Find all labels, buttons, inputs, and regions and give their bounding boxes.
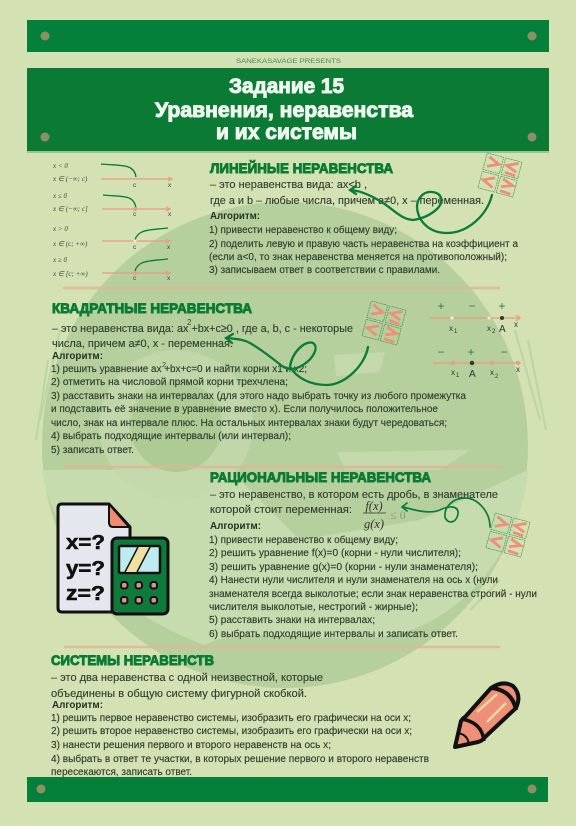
arrow: curl to formula bbox=[226, 334, 368, 385]
chart: x less or equal 0: x bbox=[168, 211, 172, 218]
bar rivet right bbox=[528, 32, 536, 40]
algorithm: (если a<0, то знак неравенства меняется на противоположный); bbox=[209, 252, 507, 263]
chart: x less than 0: x ∈ (−∞; c) bbox=[52, 175, 88, 183]
equations: x=? bbox=[66, 532, 105, 554]
equations: y=? bbox=[66, 558, 105, 580]
algorithm: Алгоритм: bbox=[52, 351, 103, 362]
bottom bar bbox=[27, 777, 548, 802]
algorithm: 3) решить уравнение g(x)=0 (корни - нули знаменателя); bbox=[209, 562, 478, 573]
algorithm: 5) записать ответ. bbox=[51, 445, 134, 456]
algorithm: числителя выколотые, нестрогий - жирные); bbox=[209, 602, 418, 613]
arrow: curl to formula bbox=[402, 498, 490, 527]
title line 2: Уравнения, неравенства bbox=[155, 99, 413, 122]
number line: roots with A right: − bbox=[468, 299, 476, 313]
definition: которой стоит переменная: bbox=[210, 504, 352, 516]
definition: – это неравенство, в котором есть дробь, в знаменателе bbox=[210, 489, 498, 501]
panel: linear inequalities bbox=[209, 153, 522, 276]
algorithm: 2) решить второе неравенство системы, изобразить его графически на оси x; bbox=[51, 725, 412, 737]
definition: 2 bbox=[187, 318, 192, 327]
chart: x greater or equal 0 bbox=[52, 256, 171, 282]
number line: roots with A right: A bbox=[499, 324, 506, 335]
algorithm: 4) выбрать подходящие интервалы (или интервал); bbox=[51, 430, 291, 442]
formula fraction: f(x) bbox=[365, 499, 383, 513]
top header bar bbox=[27, 20, 549, 52]
document fold bbox=[109, 504, 129, 527]
chart: x greater than 0: x ∈ (c; +∞) bbox=[52, 240, 88, 248]
chart: x greater than 0 bbox=[52, 225, 171, 251]
definition bbox=[52, 318, 353, 350]
number line: roots with A right: x bbox=[487, 324, 491, 333]
algorithm bbox=[51, 700, 429, 778]
panel: linear inequality charts bbox=[52, 162, 172, 282]
heading: КВАДРАТНЫЕ НЕРАВЕНСТВА bbox=[52, 300, 252, 316]
icon: pencil bbox=[455, 683, 518, 747]
definition bbox=[210, 489, 498, 516]
equations bbox=[66, 532, 105, 605]
definition bbox=[51, 672, 323, 700]
chart: x less than 0 bbox=[52, 162, 172, 189]
title panel bbox=[27, 68, 549, 151]
number line: roots with A right bbox=[430, 299, 520, 335]
number line: A between roots: A bbox=[469, 369, 476, 380]
algorithm bbox=[51, 351, 466, 456]
algorithm: 4) Нанести нули числителя и нули знаменателя на ось x (нули bbox=[209, 575, 498, 586]
heading: РАЦИОНАЛЬНЫЕ НЕРАВЕНСТВА bbox=[210, 469, 431, 485]
icon: comparison tiles bbox=[362, 301, 406, 345]
algorithm: 2 bbox=[162, 360, 166, 369]
bar rivet left bbox=[36, 784, 46, 794]
chart: x greater or equal 0: c bbox=[133, 275, 137, 282]
definition: – это два неравенства с одной неизвестной, которые bbox=[51, 672, 323, 684]
panel: quadratic inequalities bbox=[51, 299, 521, 456]
definition: где a и b – любые числа, причем a≠0, x – переменная. bbox=[210, 195, 484, 207]
number line: A between roots: 2 bbox=[495, 374, 499, 380]
number line: roots with A right: x bbox=[449, 324, 453, 333]
number line: A between roots bbox=[433, 345, 521, 380]
chart: x less or equal 0: x ≤ 0 bbox=[52, 192, 67, 200]
divider 3 bbox=[64, 646, 500, 648]
chart: x greater than 0: x bbox=[167, 244, 171, 251]
divider top bbox=[27, 151, 549, 153]
bar rivet right bbox=[528, 784, 536, 794]
arrow: curl to formula bbox=[350, 186, 492, 233]
number line: roots with A right: + bbox=[498, 299, 506, 313]
equations: z=? bbox=[66, 583, 105, 605]
chart: x less or equal 0: x ∈ (−∞; c] bbox=[52, 205, 88, 213]
chart: x greater or equal 0: x ≥ 0 bbox=[52, 256, 67, 264]
algorithm: 1) привести неравенство к общему виду; bbox=[209, 534, 398, 546]
icon: comparison tiles bbox=[478, 153, 522, 197]
title rivet right bbox=[528, 132, 536, 142]
algorithm: 4) выбрать в ответ те участки, в которых решение первого и второго неравенств bbox=[51, 753, 429, 765]
title rivet left bbox=[40, 132, 50, 142]
algorithm: 1) привести неравенство к общему виду; bbox=[209, 224, 397, 236]
heading: ЛИНЕЙНЫЕ НЕРАВЕНСТВА bbox=[210, 159, 393, 176]
chart: x less than 0: c bbox=[133, 182, 137, 189]
algorithm: и подставить её значение в уравнение вместо x). Если получилось положительное bbox=[51, 404, 438, 415]
algorithm: 5) расставить знаки на интервалах; bbox=[209, 615, 375, 626]
number line: A between roots: x bbox=[516, 365, 520, 374]
number line: A between roots: + bbox=[467, 345, 475, 359]
document bbox=[58, 504, 130, 612]
chart: x greater or equal 0: x ∈ [c; +∞) bbox=[52, 270, 88, 278]
definition: объединены в общую систему фигурной скобкой. bbox=[51, 688, 307, 700]
algorithm: 6) выбрать подходящие интервалы и записать ответ. bbox=[209, 628, 458, 640]
number line: A between roots: − bbox=[500, 345, 508, 359]
panel: systems of inequalities bbox=[51, 652, 429, 778]
formula fraction bbox=[363, 499, 406, 531]
algorithm: 2) отметить на числовой прямой корни трехчлена; bbox=[51, 377, 288, 388]
definition bbox=[210, 179, 484, 207]
calculator buttons bbox=[121, 582, 157, 604]
icon: equations and calculator bbox=[58, 504, 168, 614]
divider 2 bbox=[64, 466, 500, 468]
algorithm: знаменателя всегда выколотые; если знак неравенства строгий - нули bbox=[209, 589, 537, 600]
heading: СИСТЕМЫ НЕРАВЕНСТВ bbox=[51, 652, 214, 668]
title line 1: Задание 15 bbox=[229, 75, 344, 98]
algorithm: Алгоритм: bbox=[210, 521, 261, 532]
algorithm: 3) нанести решения первого и второго неравенств на ось x; bbox=[51, 740, 331, 751]
algorithm bbox=[209, 211, 518, 276]
algorithm: 3) расставить знаки на интервалах (для этого надо выбрать точку из любого промежутка bbox=[51, 390, 466, 402]
algorithm: 3) записываем ответ в соответствии с правилами. bbox=[209, 265, 440, 276]
algorithm: Алгоритм: bbox=[210, 211, 260, 222]
number line: A between roots: x bbox=[451, 368, 455, 377]
chart: x less than 0: x bbox=[168, 182, 172, 189]
chart: x less or equal 0 bbox=[52, 192, 172, 218]
chart: x greater than 0: x > 0 bbox=[52, 225, 68, 233]
formula fraction: g(x) bbox=[364, 517, 384, 531]
number line: A between roots: 1 bbox=[456, 373, 460, 379]
title line 3: и их системы bbox=[216, 121, 357, 144]
divider 1 bbox=[63, 287, 500, 289]
definition: – это неравенства вида: ax +bx+c≥0 , где a, b, c - некоторые bbox=[52, 323, 353, 335]
icon: comparison tiles bbox=[486, 513, 530, 557]
calculator screen bbox=[119, 546, 160, 573]
number line: roots with A right: 2 bbox=[492, 329, 496, 335]
algorithm: число, знак на интервале плюс. На остальных интервалах знаки будут чередоваться; bbox=[51, 417, 447, 429]
chart: x greater than 0: c bbox=[133, 244, 137, 251]
number line: A between roots: x bbox=[490, 368, 494, 377]
formula fraction: ≤ 0 bbox=[390, 508, 406, 522]
chart: x less or equal 0: c bbox=[133, 211, 137, 218]
algorithm: 1) решить уравнение ax +bx+c=0 и найти корни x1 и x2; bbox=[51, 364, 307, 375]
bar rivet left bbox=[40, 32, 50, 40]
number line: roots with A right: + bbox=[437, 299, 445, 313]
definition: числа, причем a≠0, x - переменная. bbox=[52, 338, 233, 350]
number line: roots with A right: 1 bbox=[454, 329, 458, 335]
algorithm: Алгоритм: bbox=[52, 700, 103, 711]
presenter caption: SANEKASAVAGE PRESENTS bbox=[236, 58, 342, 65]
algorithm: 2) решить уравнение f(x)=0 (корни - нули числителя); bbox=[209, 548, 461, 559]
background brush circle bbox=[36, 202, 546, 688]
algorithm: 1) решить первое неравенство системы, изобразить его графически на оси x; bbox=[51, 712, 411, 724]
number line: roots with A right: x bbox=[514, 320, 518, 329]
algorithm bbox=[209, 521, 537, 640]
algorithm: пересекаются, записать ответ. bbox=[51, 767, 192, 778]
chart: x greater or equal 0: x bbox=[167, 275, 171, 282]
chart: x less than 0: x < 0 bbox=[52, 162, 68, 170]
calculator bbox=[112, 538, 168, 614]
algorithm: 2) поделить левую и правую часть неравенства на коэффициент а bbox=[209, 238, 518, 250]
number line: A between roots: − bbox=[437, 345, 445, 359]
panel: rational inequalities bbox=[209, 469, 537, 640]
definition: – это неравенства вида: ax<b , bbox=[210, 179, 367, 191]
